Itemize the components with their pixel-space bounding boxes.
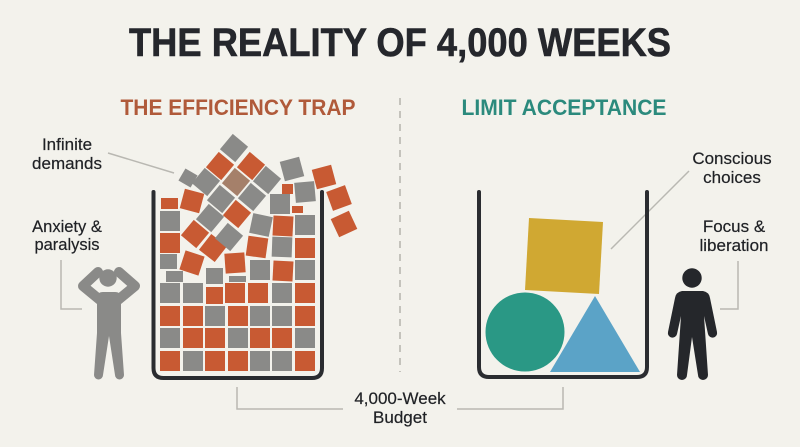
leader line: focus (720, 261, 738, 309)
label: anxiety and paralysis (32, 218, 102, 254)
label: conscious choices: Conscious (692, 149, 772, 168)
bracket: budget (237, 387, 343, 409)
leader line: conscious choices (611, 171, 689, 249)
label: conscious choices: choices (703, 168, 761, 187)
label: infinite demands: Infinite (42, 135, 92, 154)
label: infinite demands (32, 135, 102, 173)
leader line: infinite demands (108, 153, 174, 173)
label: 4,000-week budget (354, 389, 446, 427)
icon: anxious person (83, 269, 135, 380)
stacked tiles (160, 134, 357, 371)
label: anxiety and paralysis: paralysis (34, 236, 100, 254)
title: THE REALITY OF 4,000 WEEKS (129, 21, 671, 65)
label: focus and liberation (700, 217, 768, 255)
icon: calm person (668, 268, 717, 380)
triangle: blue (550, 296, 640, 372)
label: anxiety and paralysis: Anxiety & (32, 218, 102, 236)
label: infinite demands: demands (32, 154, 102, 173)
leader line: anxiety (61, 260, 82, 309)
bracket: budget right (457, 387, 563, 409)
big square: yellow (525, 218, 603, 294)
label: focus and liberation: liberation (700, 236, 768, 255)
label: focus and liberation: Focus & (703, 217, 766, 236)
heading: the efficiency trap: THE EFFICIENCY TRAP (120, 95, 356, 120)
bucket: efficiency trap (154, 192, 322, 378)
bucket: limit acceptance (479, 192, 647, 377)
label: 4,000-week budget: 4,000-Week (354, 389, 446, 408)
heading: limit acceptance: LIMIT ACCEPTANCE (462, 95, 666, 120)
label: 4,000-week budget: Budget (373, 408, 427, 427)
circle: teal (486, 292, 564, 372)
label: conscious choices (692, 149, 772, 187)
